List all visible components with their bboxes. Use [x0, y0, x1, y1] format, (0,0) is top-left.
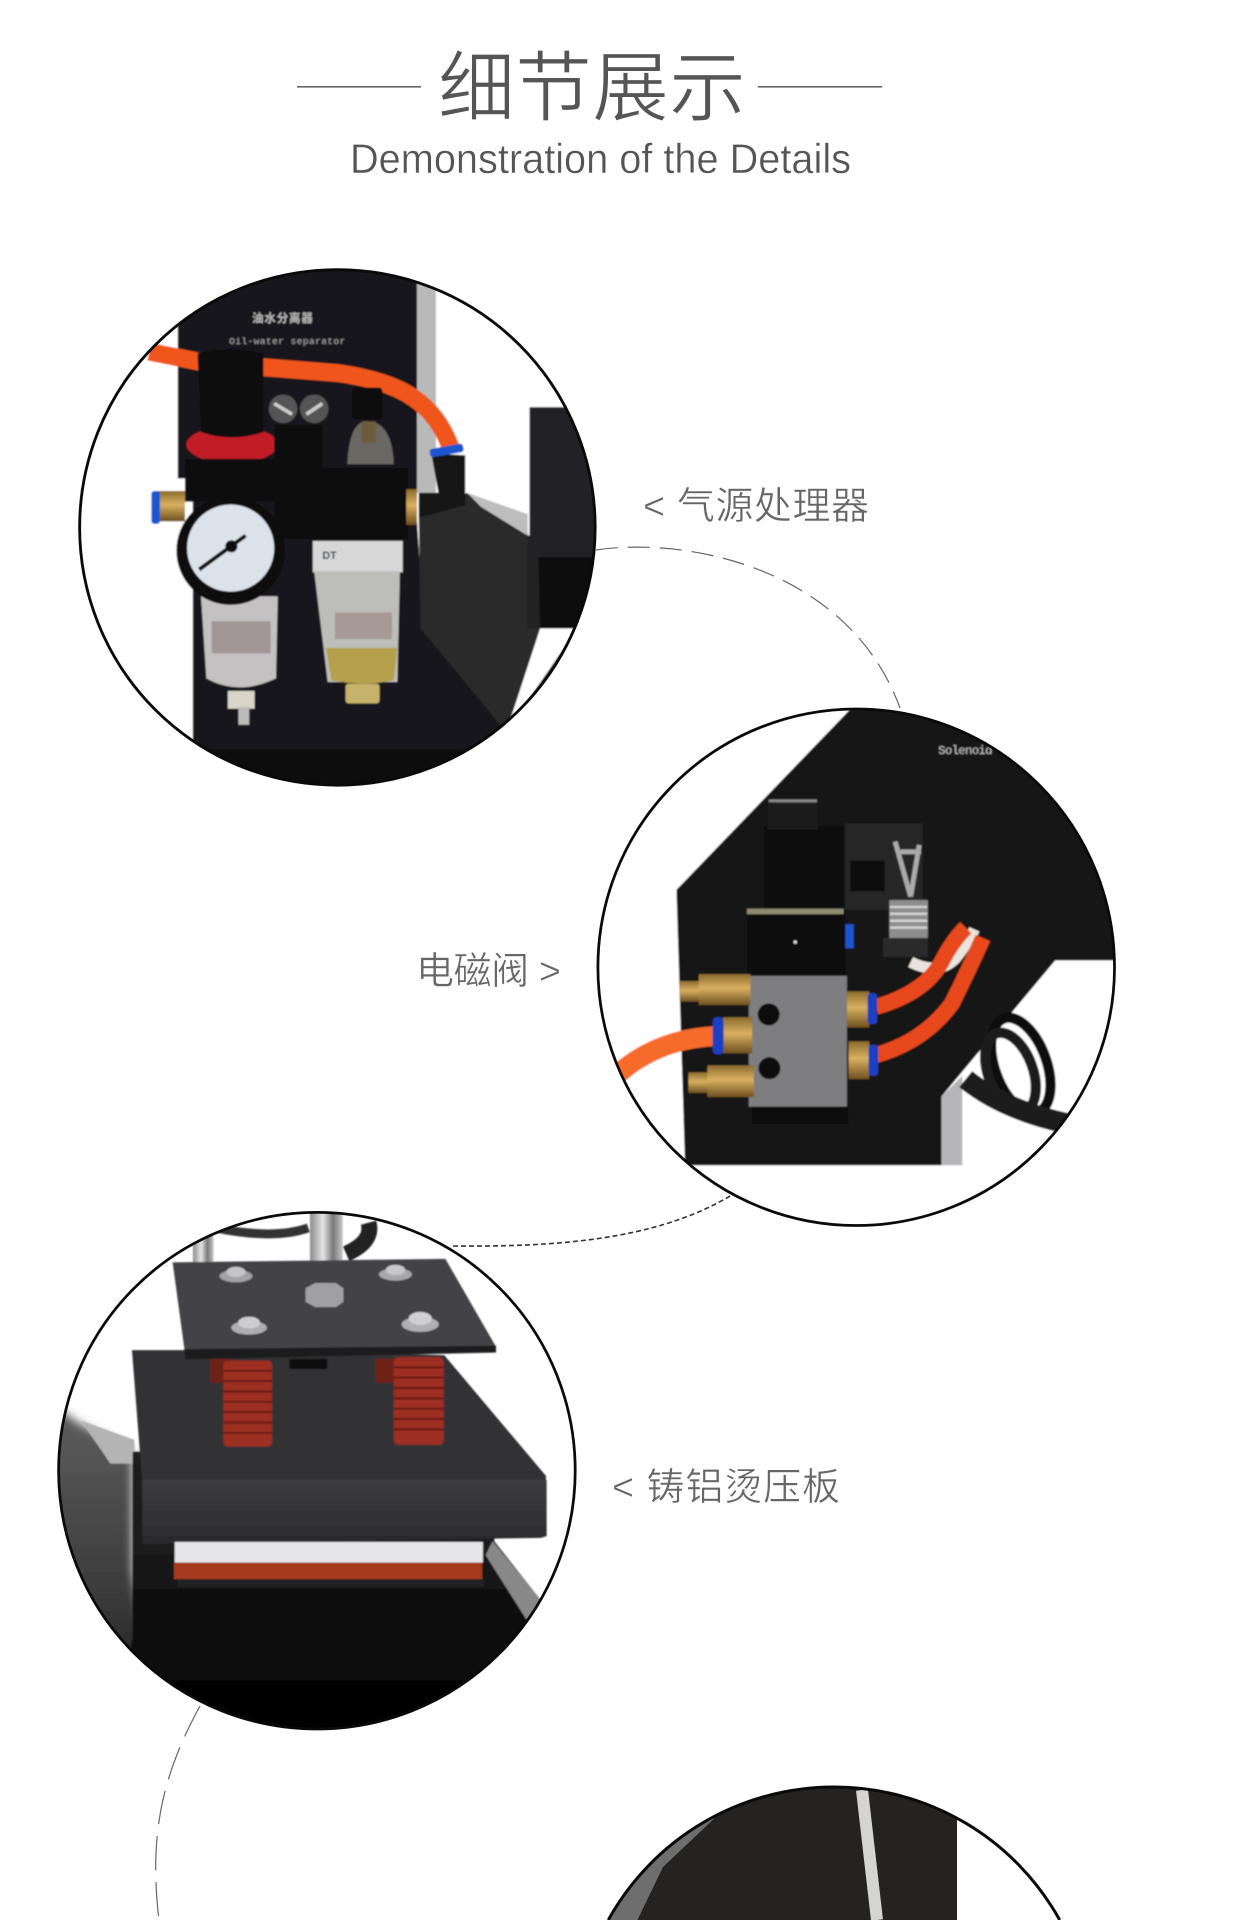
- detail circle: next detail, cropped at page bottom: [600, 1780, 1060, 1920]
- orange inlet tube: [618, 1036, 718, 1074]
- red ring: [185, 430, 276, 460]
- title english subtitle: Demonstration of the Details: [350, 135, 851, 182]
- lower platen front: [142, 1480, 547, 1544]
- label: solenoid valve: 电磁阀 >: [416, 951, 561, 993]
- white wire: [862, 1790, 877, 1920]
- circle outline: [80, 270, 595, 785]
- title left rule: [297, 86, 421, 88]
- black mounting plate: [676, 690, 1131, 1165]
- connector: solenoid valve to heat platen: [453, 1185, 747, 1246]
- valve body: [747, 909, 845, 978]
- brass silencers: [680, 981, 701, 1002]
- pressure gauge: [176, 496, 285, 605]
- black back panel: [176, 271, 565, 752]
- push fitting left: [156, 491, 185, 521]
- title chinese heading: 细节展示: [438, 46, 746, 132]
- connector: heat platen to next detail: [156, 1706, 200, 1920]
- silver column: [415, 279, 436, 493]
- top plate: [173, 1259, 496, 1359]
- white wire: [911, 929, 974, 968]
- detail circle: air treatment unit photo: Oil-water separator: [229, 336, 345, 347]
- grey wedge: [600, 1800, 718, 1920]
- label: cast aluminium heat platen: < 铸铝烫压板: [612, 1467, 840, 1509]
- cable at top: [215, 1228, 308, 1234]
- mounting screws: [269, 395, 297, 423]
- detail circle: air treatment unit photo: DT: [322, 550, 337, 562]
- lubricator top: [352, 387, 382, 420]
- circle outline: [59, 1212, 575, 1729]
- bolts: [219, 1270, 253, 1282]
- machine body left side: [60, 1406, 138, 1650]
- elbow fitting: [419, 453, 465, 518]
- label: air treatment unit: < 气源处理器: [643, 486, 869, 528]
- rear springs: [210, 1359, 231, 1383]
- orange air tube: [149, 352, 451, 448]
- panel label: Solenoid: [938, 744, 993, 758]
- solenoid coil: [764, 826, 843, 909]
- coiled power cable: [988, 1012, 1057, 1110]
- circle outline: [598, 709, 1115, 1226]
- white platen foam: [175, 1542, 483, 1563]
- filter bowl: [201, 596, 278, 687]
- orange outlet tubes: [876, 928, 966, 1007]
- machine body lower: [119, 1452, 601, 1741]
- title: [297, 46, 882, 182]
- title right rule: [758, 86, 882, 88]
- lubricator bowl: [314, 571, 400, 682]
- silver column: [942, 1076, 962, 1165]
- red silicone pad: [174, 1563, 482, 1579]
- lubricator label: [313, 541, 403, 572]
- circle outline: [608, 1787, 1060, 1920]
- connector: air treatment to solenoid valve: [596, 547, 900, 708]
- transparent connector: [845, 824, 923, 910]
- lower platen top: [132, 1350, 546, 1483]
- detail circle: cast aluminium heat platen photo: [57, 1211, 577, 1730]
- detail circle: solenoid valve photo: [580, 690, 1131, 1230]
- detail circle: air treatment unit photo: [78, 268, 597, 787]
- shaft nut: [306, 1283, 343, 1307]
- front springs: [223, 1357, 444, 1447]
- regulator knob: [197, 349, 263, 437]
- guide rods: [192, 1236, 214, 1263]
- panel label: 油水分离器: [252, 311, 313, 325]
- black panel: [600, 1780, 957, 1920]
- aluminium block: [749, 976, 847, 1107]
